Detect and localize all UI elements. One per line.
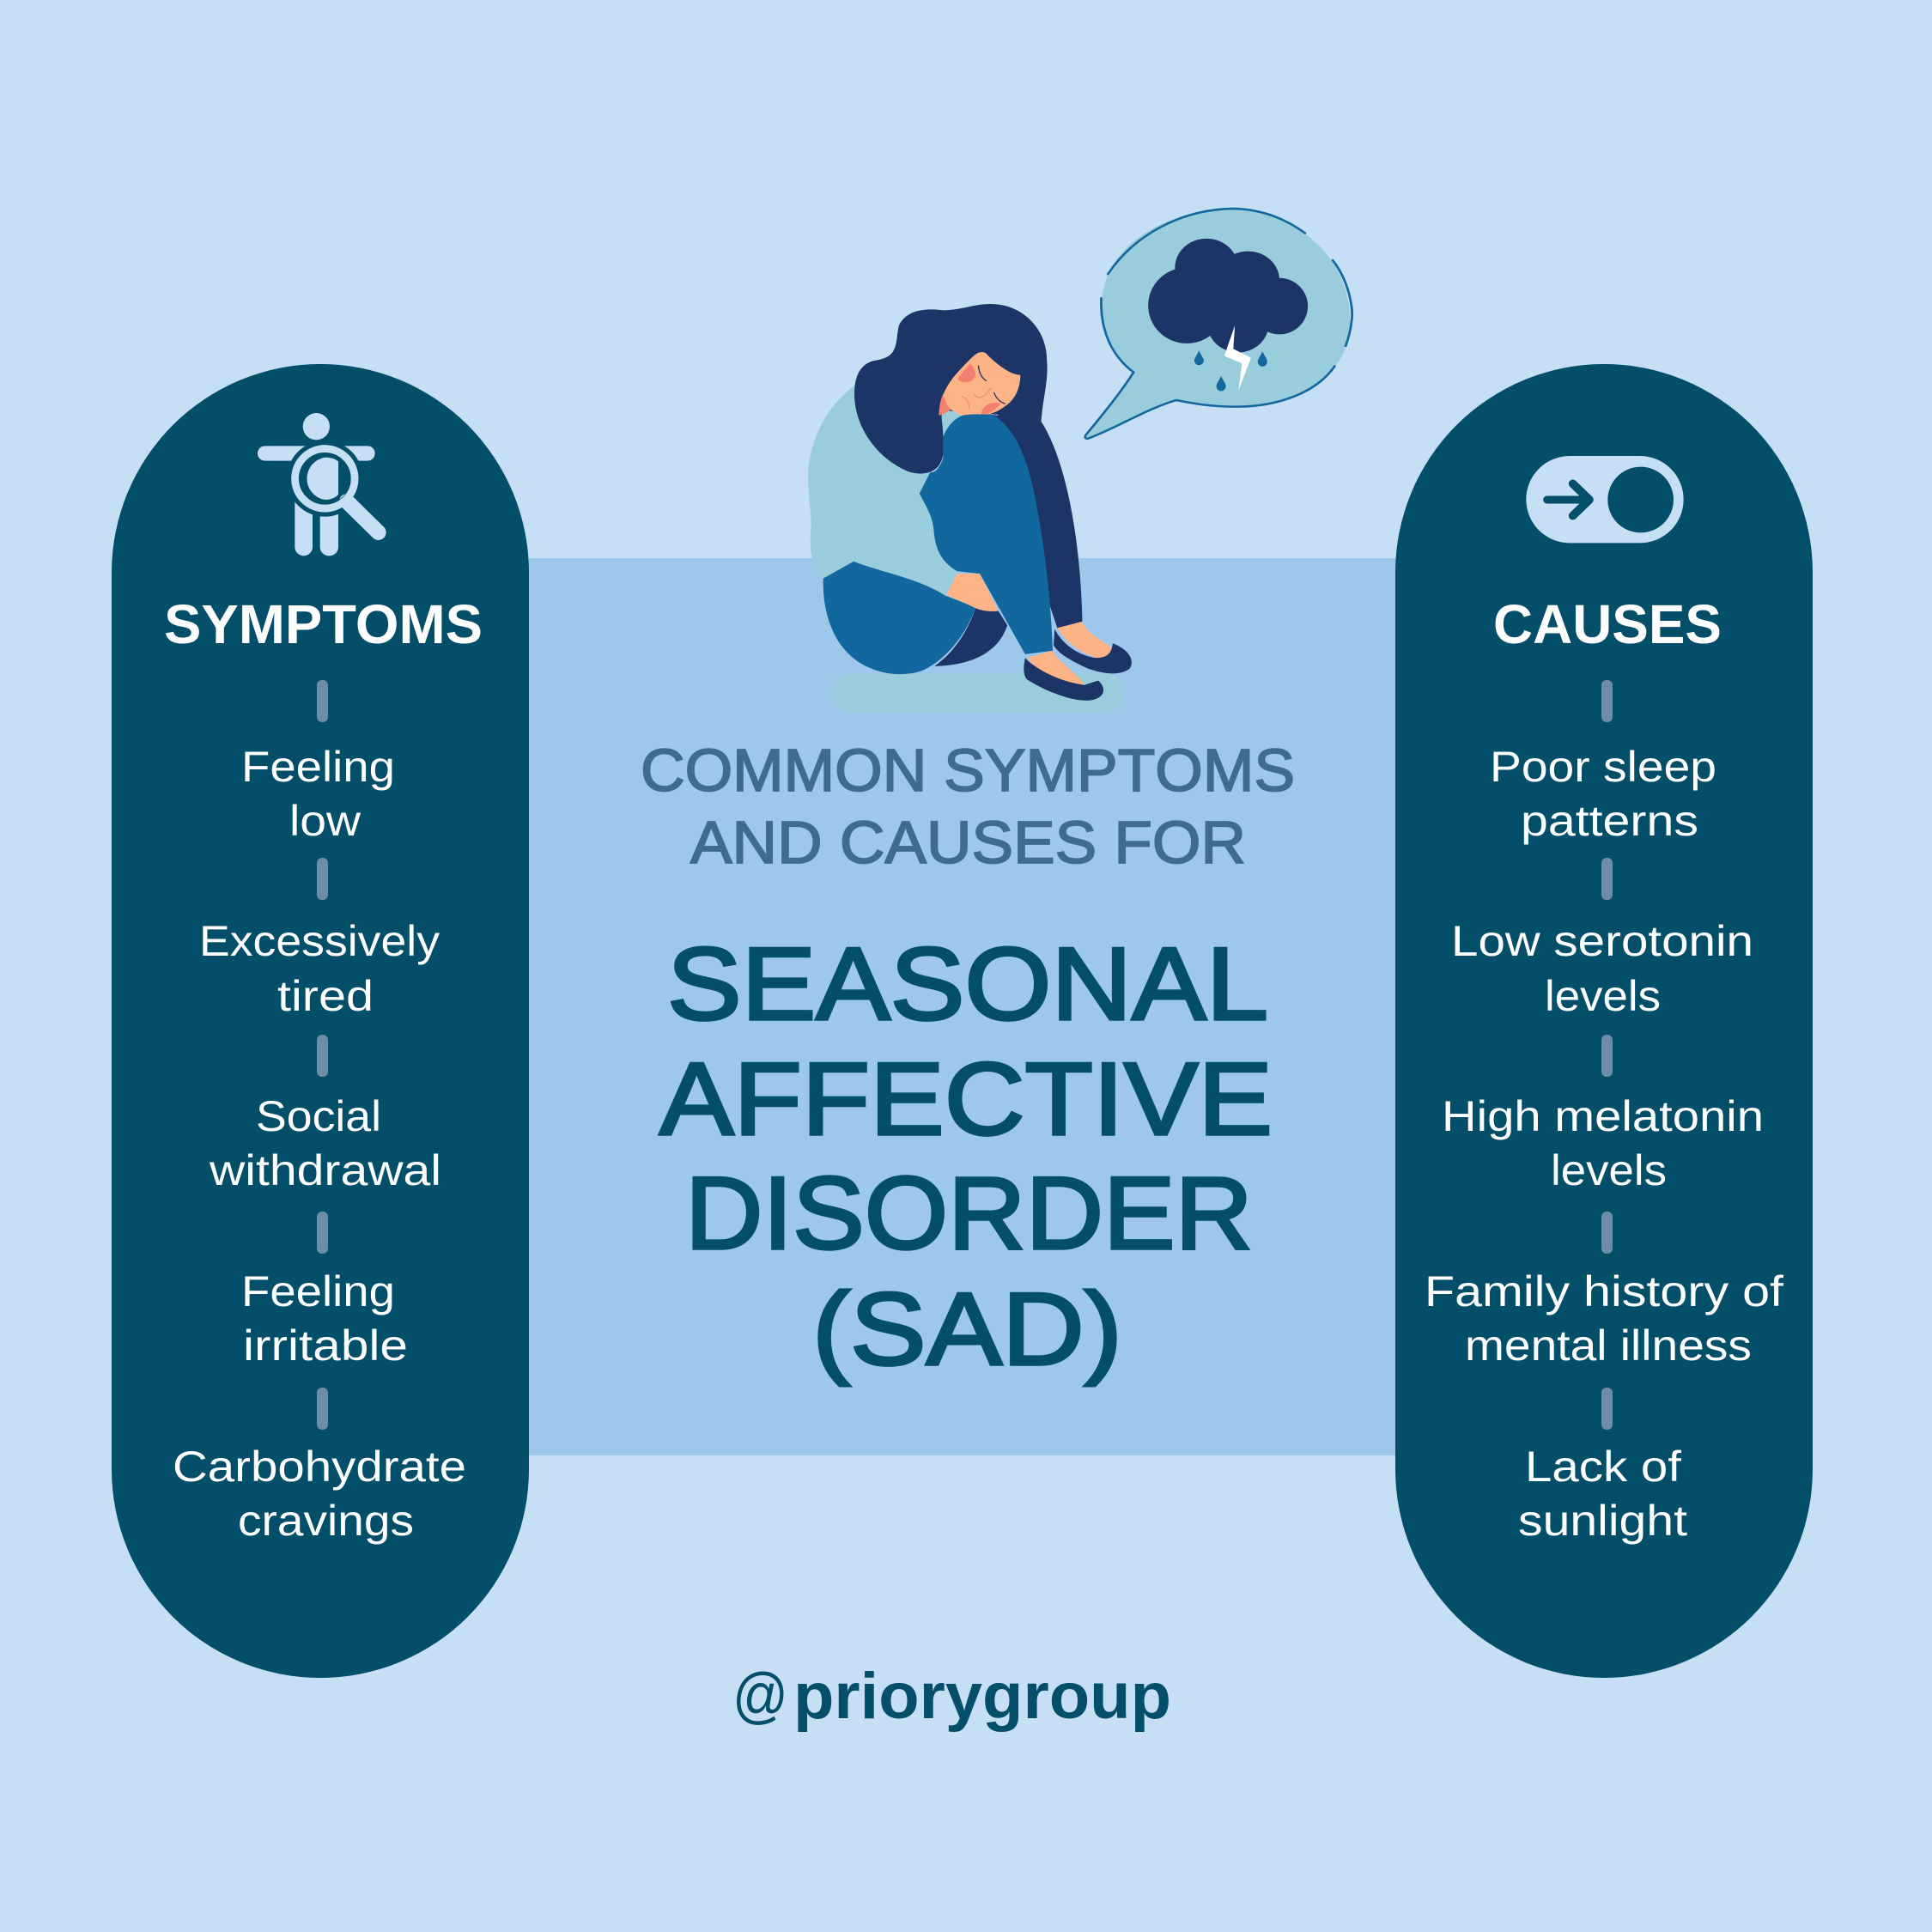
symptoms list: Feeling (241, 1267, 395, 1315)
symptoms list: tired (277, 972, 374, 1020)
panel: symptoms (112, 364, 529, 1678)
speech bubble with storm cloud (1085, 209, 1352, 439)
main title: DISORDER (685, 1156, 1253, 1271)
symptoms list: irritable (243, 1321, 408, 1370)
social handle: priorygroup (793, 1660, 1171, 1733)
subtitle: AND CAUSES FOR (690, 809, 1246, 876)
symptoms list: cravings (238, 1497, 414, 1545)
subtitle (641, 737, 1295, 876)
causes list: Poor sleep (1490, 743, 1716, 791)
causes list: mental illness (1465, 1321, 1752, 1370)
causes list: Lack of (1525, 1443, 1681, 1491)
symptoms list: Excessively (199, 917, 440, 965)
causes list: sunlight (1518, 1497, 1687, 1545)
social handle: @ (732, 1662, 788, 1730)
woman figure (808, 304, 1132, 701)
causes list: levels (1545, 972, 1661, 1020)
main title: SEASONAL (667, 927, 1268, 1042)
panel: causes (1395, 364, 1813, 1678)
causes list (1425, 680, 1783, 1545)
symptoms list: Social (256, 1092, 381, 1140)
causes list: levels (1551, 1146, 1667, 1194)
causes list: patterns (1521, 797, 1698, 845)
face (939, 352, 1020, 416)
symptoms list: Carbohydrate (173, 1443, 466, 1491)
main title (659, 927, 1273, 1387)
causes list: High melatonin (1442, 1092, 1764, 1140)
icon: toggle switch with arrow (1526, 456, 1684, 543)
main title: AFFECTIVE (659, 1042, 1273, 1157)
floor shadow (832, 673, 1124, 713)
symptoms list: low (289, 797, 361, 845)
main title: (SAD) (812, 1272, 1122, 1387)
symptoms list (173, 680, 466, 1545)
symptoms list: withdrawal (209, 1146, 441, 1194)
causes list: Low serotonin (1451, 917, 1753, 965)
illustration: sad woman with thought bubble (808, 209, 1352, 713)
subtitle: COMMON SYMPTOMS (641, 737, 1295, 804)
heading: causes: CAUSES (1493, 593, 1722, 655)
central band (515, 558, 1408, 1455)
causes list: Family history of (1425, 1267, 1783, 1315)
title block (641, 737, 1295, 1387)
heading: symptoms: SYMPTOMS (164, 593, 483, 655)
symptoms list: Feeling (241, 743, 395, 791)
icon: body with magnifying glass (265, 413, 379, 556)
